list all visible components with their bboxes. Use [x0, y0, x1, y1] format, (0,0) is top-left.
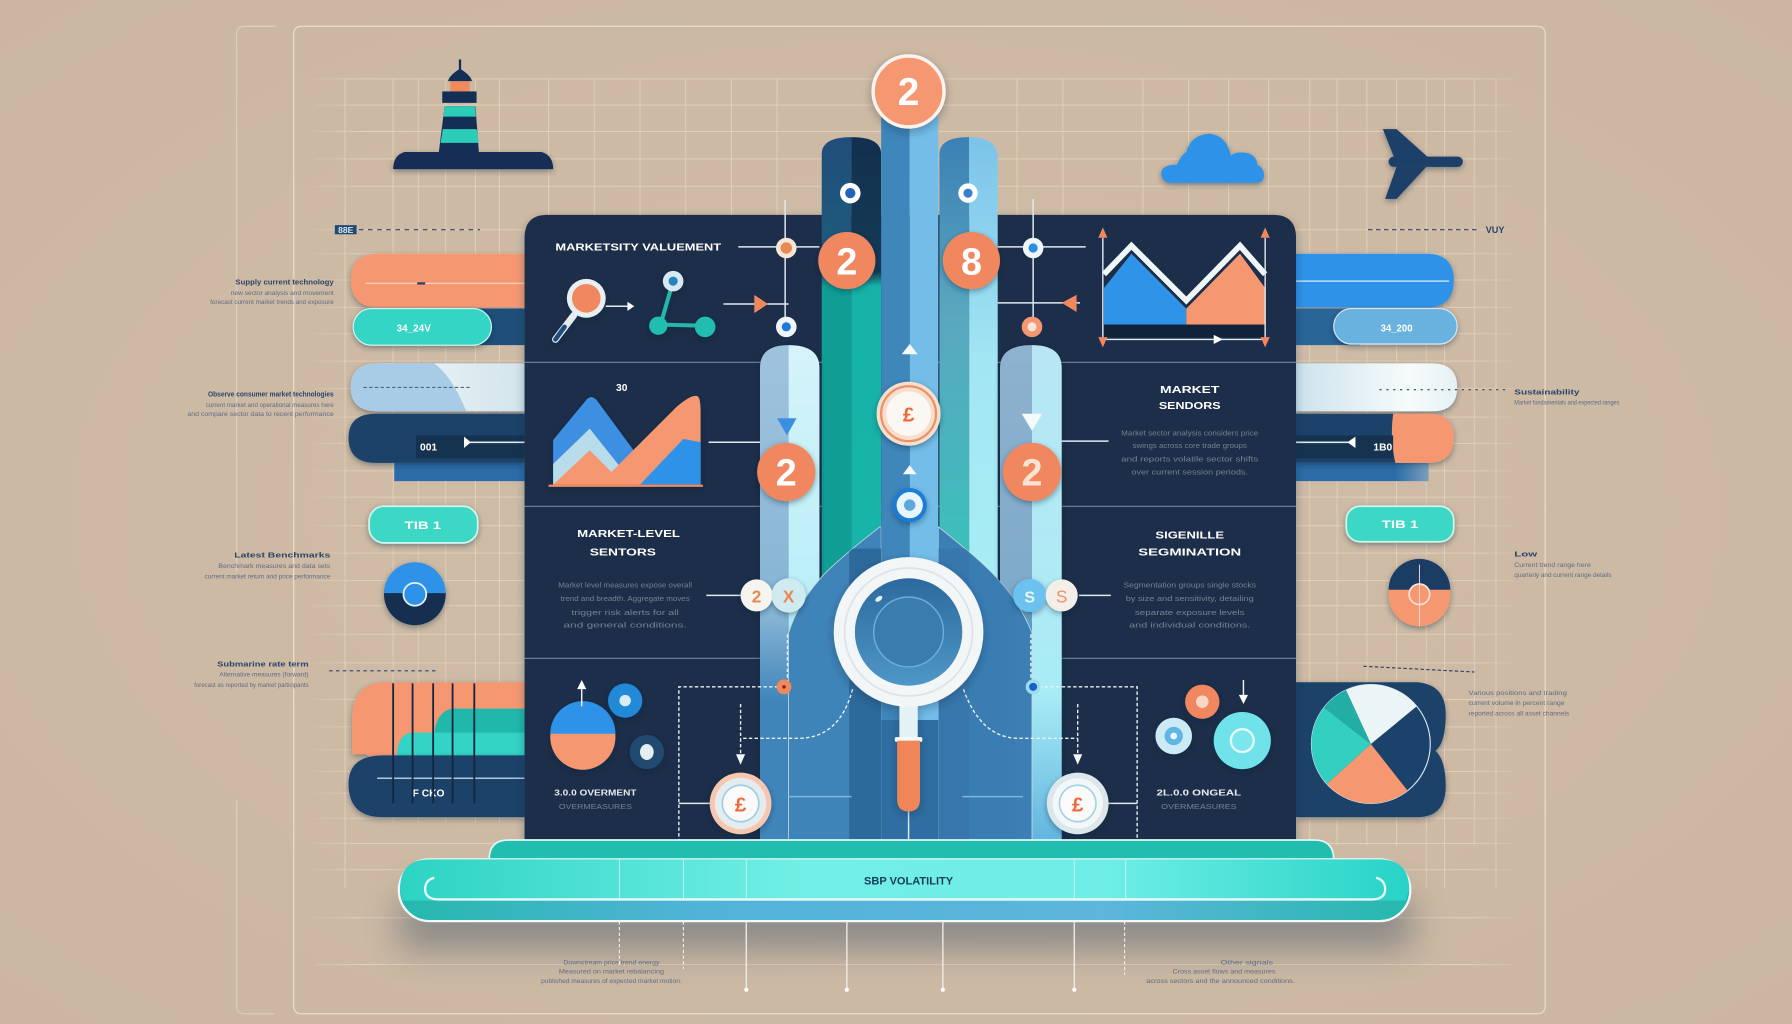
bottom text right: across sectors and the announced conditions. — [1146, 978, 1295, 985]
text: lower right: OVERMEASURES — [1161, 802, 1237, 811]
callout text: left 3 — [205, 551, 331, 580]
icon: orange navy dial — [1389, 559, 1450, 626]
callout text: left 1: new sector analysis and movement — [231, 290, 334, 297]
arrows: down to coins — [736, 754, 1082, 765]
text: lower left: OVERMEASURES — [559, 802, 632, 811]
pill: teal tab — [369, 506, 478, 543]
callout text: left 2: and compare sector data to recent performance — [187, 411, 334, 418]
callout text: right 2: quarterly and current range details — [1514, 572, 1611, 579]
callout text: right 3: reported across all asset channels — [1469, 710, 1569, 717]
callout: top left tag — [335, 225, 480, 235]
icon: split pie left — [550, 701, 615, 770]
number badge: 2 lower right — [1003, 443, 1061, 501]
callout: top right tag — [1368, 225, 1504, 235]
right tabs — [1296, 254, 1457, 817]
callout text: right 1: Sustainability — [1514, 387, 1581, 396]
text block: market sendors: swings across core trade groups — [1133, 441, 1247, 450]
text: lower left — [554, 787, 637, 811]
callout text: left 2: Observe consumer market technologies — [208, 390, 334, 399]
main panel — [525, 215, 1296, 840]
column: top right blue cyan — [939, 137, 998, 840]
magnifier — [834, 557, 983, 811]
coin: blue eye — [893, 488, 927, 522]
pill: teal tab right: TIB 1 — [1382, 519, 1419, 531]
text block: sigenille segmination: Segmentation groups single stocks — [1123, 580, 1256, 589]
text block: market level sentors: trend and breadth. Aggregate moves — [561, 594, 690, 603]
pill: teal label: 34_24V — [397, 323, 431, 334]
label: chart value: 30 — [616, 383, 628, 394]
central columns — [760, 114, 1062, 846]
callout text: right 2: Current trend range here — [1514, 562, 1591, 569]
text block: market sendors: over current session periods. — [1131, 467, 1248, 476]
bar: SBP volatility: SBP VOLATILITY — [864, 876, 954, 888]
coin: bottom left: £ — [735, 793, 747, 816]
coin: bottom right: £ — [1072, 793, 1084, 816]
text block: sigenille segmination: SEGMINATION — [1138, 547, 1241, 558]
text block: sigenille segmination: separate exposure levels — [1135, 608, 1245, 617]
bar shadow — [400, 897, 1411, 949]
column: lower right — [1000, 345, 1062, 840]
coin pair left — [741, 578, 806, 613]
tab: navy orange — [1296, 414, 1454, 481]
pill: blue label: 34_200 — [1381, 323, 1413, 334]
callout text: left 1: forecast current market trends and exposure — [210, 299, 334, 306]
tab: white — [1296, 363, 1457, 411]
arrow: orange — [754, 295, 768, 313]
icon: cloud — [1161, 134, 1264, 183]
coin pair left: X — [783, 586, 795, 606]
callout text: left 1: Supply current technology — [235, 278, 335, 287]
tab: navy: 001 — [420, 442, 437, 453]
text block: market sendors: and reports volatile sector shifts — [1121, 455, 1259, 464]
number badge: 2 lower left — [757, 443, 815, 501]
text block: sigenille segmination: by size and sensitivity, detailing — [1126, 594, 1254, 603]
callout text: left 3: Benchmark measures and data sets — [218, 563, 330, 570]
tab: navy under blue pill — [1296, 309, 1360, 345]
bottom text right: Cross asset flows and measures — [1173, 969, 1276, 976]
number badge: 2 lower right: 2 — [1022, 452, 1042, 494]
pill: teal tab: TIB 1 — [405, 520, 442, 532]
text block: market sendors — [1121, 385, 1259, 476]
bottom text right: Other signals — [1221, 960, 1274, 967]
text block: market sendors: MARKET — [1160, 385, 1220, 396]
text block: market level sentors: MARKET-LEVEL — [577, 529, 680, 540]
coin pair right: S — [1056, 586, 1067, 606]
callout: top right tag: VUY — [1486, 225, 1504, 235]
icon: navy badge — [630, 735, 664, 769]
text block: sigenille segmination — [1123, 530, 1256, 629]
callout text: left 2 — [187, 390, 334, 418]
bar: SBP volatility — [399, 859, 1410, 921]
tab: orange — [351, 254, 525, 307]
column: lower left — [760, 345, 819, 840]
arrow — [606, 302, 634, 311]
tab: light blue — [351, 363, 525, 411]
icon: lighthouse — [393, 59, 553, 169]
text block: market sendors: Market sector analysis considers price — [1121, 428, 1258, 437]
coin pair right — [1013, 579, 1078, 612]
callout text: left 1 — [210, 278, 335, 306]
icon: molecule — [649, 271, 715, 337]
panel heading: MARKETSITY VALUEMENT — [555, 242, 721, 253]
bottom text left: Downstream price trend energy — [563, 960, 660, 967]
coin: bottom right — [1047, 773, 1109, 834]
callout text: right 3: current volume in percent range — [1469, 700, 1565, 707]
tab: bottom stacked — [349, 682, 525, 817]
callout text: left 4: Submarine rate term — [217, 659, 309, 668]
callout text: left 3: current market return and price performance — [205, 573, 331, 580]
callout text: left 4: forecast as reported by market participants — [194, 682, 309, 689]
connector lines — [679, 199, 1137, 859]
icon: plane — [1383, 129, 1463, 199]
dashed callout lines left — [329, 670, 439, 672]
text block: sigenille segmination: SIGENILLE — [1155, 530, 1224, 541]
bottom drop lines — [619, 921, 1125, 992]
coin pair right: S — [1024, 589, 1035, 606]
tab: navy orange: 1B0 — [1373, 442, 1393, 453]
text block: market level sentors: SENTORS — [590, 547, 656, 558]
callout text: left 4: Alternative measures (forward) — [219, 672, 309, 679]
area chart right — [1098, 227, 1270, 347]
coin: center pound: £ — [903, 404, 915, 427]
body: wings — [789, 526, 1032, 840]
number badge: 2 top: 2 — [898, 71, 919, 114]
pie chart — [1311, 685, 1430, 803]
callout text: right 3: Various positions and trading — [1469, 690, 1567, 697]
text: lower right: 2L.0.0 ONGEAL — [1157, 787, 1241, 797]
ring markers — [776, 183, 1043, 694]
number badge: 2 top — [873, 56, 944, 127]
tab: bottom stacked: F CKO — [413, 789, 445, 800]
tab: blue — [1296, 254, 1454, 307]
arrow: up — [577, 680, 586, 706]
tab: navy — [349, 414, 525, 481]
bottom text left: Measured on market rebalancing — [559, 969, 664, 976]
number badge: 8 upper right — [943, 232, 1000, 289]
coin: bottom left — [710, 773, 771, 834]
callout text: right 3 — [1363, 666, 1569, 717]
callout: top left tag: 88E — [338, 225, 354, 235]
dashed connectors — [679, 634, 1137, 840]
text block: market level sentors: and general conditions. — [563, 620, 687, 629]
text block: market sendors: SENDORS — [1159, 401, 1221, 412]
text block: market level sentors: trigger risk alerts for all — [571, 608, 679, 617]
text block: market level sentors: Market level measures expose overall — [558, 580, 692, 589]
column: center — [881, 114, 938, 846]
text block: sigenille segmination: and individual conditions. — [1129, 620, 1250, 629]
arrow: orange right — [1062, 295, 1077, 312]
pill: blue label — [1334, 309, 1457, 344]
bar: upper teal — [489, 840, 1334, 859]
text block: market level sentors — [558, 529, 692, 629]
icon: blue badge — [608, 683, 642, 718]
bottom text left — [541, 960, 682, 985]
area chart left — [549, 396, 703, 486]
callout text: right 1: Market fundamentals and expected ranges — [1514, 400, 1619, 407]
number badge: 2 upper left — [818, 232, 875, 289]
text: lower left: 3.0.0 OVERMENT — [554, 787, 637, 797]
left tabs — [349, 254, 525, 817]
arrow: down — [1239, 680, 1248, 704]
callout text: left 3: Latest Benchmarks — [234, 551, 330, 560]
pill: teal tab right — [1346, 506, 1454, 542]
arrows: center up — [902, 344, 918, 474]
column: top left navy teal — [822, 137, 881, 840]
coin: center pound — [877, 382, 941, 446]
bottom text left: published measures of expected market motion. — [541, 978, 682, 985]
number badge: 2 lower left: 2 — [776, 452, 797, 494]
icon: orange badge — [1185, 685, 1219, 719]
callout text: right 1 — [1379, 387, 1619, 407]
tab: pie base — [1296, 682, 1446, 817]
pointer triangles — [777, 414, 1042, 435]
callout text: right 2: Low — [1514, 550, 1538, 559]
background grid — [314, 79, 1514, 965]
icon: cyan badge — [1214, 712, 1271, 769]
icon: light badge — [1155, 718, 1192, 754]
icon: magnifying glass — [555, 279, 606, 339]
callout text: left 2: current market and operational measures here — [206, 402, 334, 409]
number badge: 2 upper left: 2 — [836, 240, 857, 282]
bottom text right — [1146, 960, 1295, 985]
coin pair left: 2 — [752, 586, 761, 606]
tab: navy under teal pill — [434, 309, 525, 345]
pill: teal label — [353, 309, 491, 345]
callout text: left 4 — [194, 659, 309, 689]
icon: blue navy dial — [384, 562, 446, 625]
background frames — [237, 26, 1545, 1014]
callout text: right 2 — [1514, 550, 1611, 579]
number badge: 8 upper right: 8 — [961, 240, 982, 282]
text: lower right — [1157, 787, 1241, 811]
